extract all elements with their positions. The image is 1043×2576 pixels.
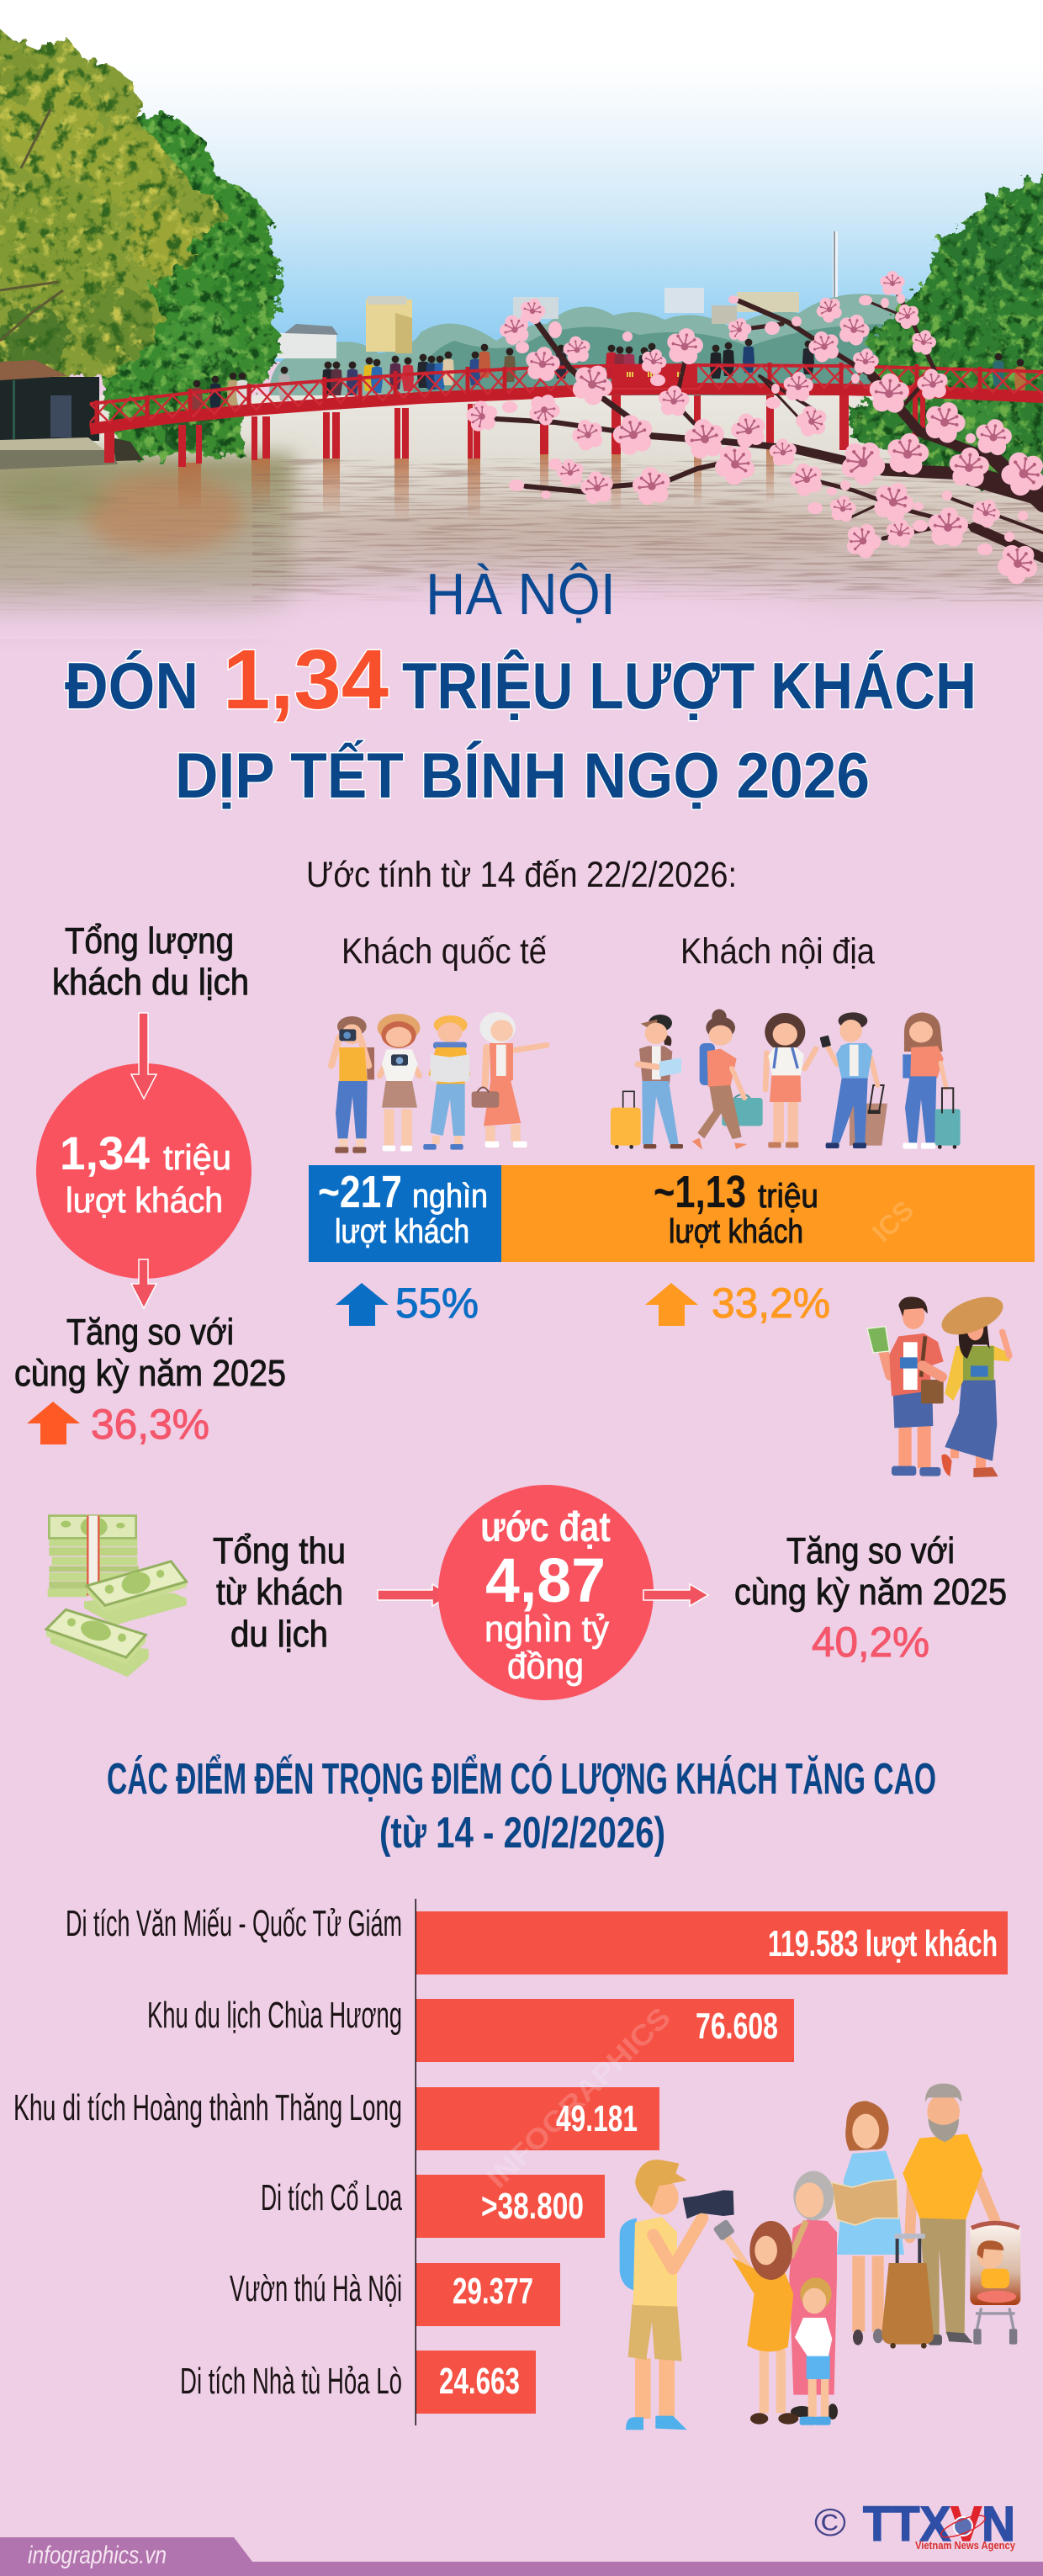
heading: domestic visitors: Khách nội địa: [680, 931, 875, 972]
watermark across bars: INFOGRAPHICS: [481, 2001, 677, 2195]
section heading: key destinations: (từ 14 - 20/2/2026): [379, 1809, 665, 1858]
row labels: Khu du lịch Chùa Hương: [147, 1995, 402, 2036]
panel: tourism revenue: [46, 1485, 1007, 1700]
pavilion and embankment: [0, 360, 143, 469]
left tree yellow-green: [0, 21, 226, 383]
arrow: down from circle: [131, 1259, 156, 1308]
panel: total visitors: [14, 920, 286, 1448]
water reflections and ripples: [0, 446, 1043, 686]
lake water: [0, 395, 1043, 639]
footer band: [0, 2537, 1043, 2576]
label: total visitors: khách du lịch: [52, 962, 249, 1003]
stat: 55%: 55%: [395, 1280, 479, 1327]
heading: dịp Tết Bính Ngọ 2026: DỊP TẾT BÍNH NGỌ 2026: [175, 740, 870, 812]
label: revenue increase vs 2025: Tăng so với: [786, 1530, 955, 1572]
label: total revenue: du lịch: [230, 1614, 328, 1655]
label: total revenue: từ khách: [216, 1572, 343, 1613]
red circle: 1.34 million: 1,34: [60, 1126, 150, 1179]
agency name: Vietnam News Agency: [915, 2539, 1016, 2552]
label: revenue increase vs 2025: cùng kỳ năm 2025: [734, 1572, 1007, 1613]
bars: [416, 1911, 1008, 2414]
row labels: Vườn thú Hà Nội: [230, 2268, 402, 2309]
red circle: 4.87 trillion dong: ước đạt: [480, 1503, 611, 1550]
cherry blossom flowers: [463, 271, 1043, 591]
bar values: 76.608: [696, 2006, 778, 2047]
footer credit: infographics.vn: [28, 2542, 167, 2569]
illustration: family travelling: [620, 2084, 1020, 2430]
icon: up arrow orange-red: [27, 1402, 80, 1444]
value: 217 thousand: nghìn: [412, 1178, 488, 1215]
stacked bar: international vs domestic: ICS: [866, 1195, 919, 1248]
man with stroller: [903, 2084, 995, 2345]
row labels: Di tích Nhà tù Hỏa Lò: [180, 2361, 402, 2402]
label: total revenue: [213, 1530, 346, 1655]
red circle: 1.34 million: lượt khách: [66, 1180, 223, 1220]
arrow: out of revenue circle: [643, 1584, 708, 1606]
label: increase vs 2025: cùng kỳ năm 2025: [14, 1353, 286, 1394]
arrow: into revenue circle: [378, 1584, 450, 1606]
bridge crowd: [191, 339, 1026, 414]
panel: hero photo of Huc Bridge at Hoan Kiem Lake: [0, 0, 1043, 686]
right tree: [850, 172, 1043, 498]
subtitle: estimate period: Ước tính từ 14 đến 22/2/2026:: [306, 855, 737, 895]
red wooden bridge: [90, 363, 1043, 467]
mother with map: [831, 2101, 904, 2345]
left tree dark green: [84, 115, 283, 458]
bar chart: visitors by destination: [13, 1899, 1008, 2425]
section heading: key destinations: [107, 1754, 936, 1858]
suitcase: [882, 2234, 934, 2349]
bar values: 49.181: [556, 2098, 638, 2139]
value: 1.13 million: [654, 1167, 818, 1250]
grandmother: [789, 2171, 838, 2420]
panel: international and domestic split: [309, 931, 1035, 1477]
heading: international visitors: Khách quốc tế: [341, 931, 547, 972]
red circle: 4.87 trillion dong: [438, 1485, 654, 1700]
bar values: 24.663: [439, 2361, 520, 2402]
bar values: 29.377: [453, 2271, 533, 2312]
value: 1.13 million: triệu: [758, 1178, 818, 1215]
stat: 40.2%: 40,2%: [812, 1619, 929, 1666]
stat: 36.3%: 36,3%: [91, 1401, 209, 1448]
value: 1.13 million: ~1,13: [654, 1167, 746, 1217]
value: 217 thousand: lượt khách: [335, 1213, 469, 1250]
logo: TTXVN Vietnam News Agency: [814, 2497, 1016, 2552]
red circle: 1.34 million: [36, 1063, 251, 1279]
heading: triệu lượt khách: TRIỆU LƯỢT KHÁCH: [402, 649, 977, 723]
distant tree line and buildings: [269, 231, 950, 395]
icon: stacks of banknotes: [46, 1516, 187, 1677]
illustration: tourist couple: [867, 1290, 1012, 1477]
label: revenue increase vs 2025: [734, 1530, 1007, 1613]
title block: [65, 561, 977, 812]
young man with camera: [620, 2160, 734, 2430]
value: 1.13 million: lượt khách: [669, 1213, 803, 1250]
label: total visitors: [52, 920, 249, 1003]
stat: 33.2%: 33,2%: [712, 1280, 830, 1327]
small boy with ice cream: [795, 2277, 832, 2425]
red circle: 1.34 million: triệu: [163, 1137, 231, 1177]
girl in yellow dress: [712, 2219, 798, 2425]
highlight number 1,34: 1,34: [223, 633, 389, 727]
stacked bar: international vs domestic: [309, 1165, 1035, 1262]
bar values: >38.800: [481, 2186, 584, 2227]
copyright mark: ©: [814, 2500, 846, 2544]
red circle: 4.87 trillion dong: 4,87: [485, 1545, 606, 1615]
icon: up arrow orange: [645, 1283, 698, 1326]
illustration: international tourists: [331, 1012, 547, 1153]
wordmark TTXVN: TTXVN: [863, 2497, 1015, 2552]
row labels: Di tích Cổ Loa: [261, 2177, 402, 2218]
tree branches: [0, 109, 63, 341]
icon: up arrow blue: [336, 1283, 389, 1326]
value: 217 thousand: [318, 1167, 488, 1250]
row labels: Khu di tích Hoàng thành Thăng Long: [13, 2087, 402, 2128]
red circle: 4.87 trillion dong: nghìn tỷ: [484, 1609, 609, 1650]
illustration: domestic tourists with luggage: [611, 1010, 961, 1150]
red circle: 4.87 trillion dong: đồng: [507, 1646, 584, 1687]
label: increase vs 2025: Tăng so với: [66, 1312, 234, 1353]
arrow: down into circle: [131, 1013, 156, 1099]
sky: [0, 0, 1043, 362]
label: total visitors: Tổng lượng: [65, 920, 234, 962]
label: increase vs 2025: [14, 1312, 286, 1394]
bar values: [439, 1923, 998, 2402]
value: 217 thousand: ~217: [318, 1167, 402, 1217]
label: total revenue: Tổng thu: [213, 1530, 346, 1572]
heading: Đón: ĐÓN: [65, 649, 199, 723]
heading: Hà Nội: HÀ NỘI: [426, 561, 616, 627]
row labels: Di tích Văn Miếu - Quốc Tử Giám: [66, 1903, 402, 1944]
row labels: [13, 1903, 402, 2402]
cherry blossom branches: [496, 290, 1043, 558]
stroller with baby: [970, 2223, 1020, 2345]
